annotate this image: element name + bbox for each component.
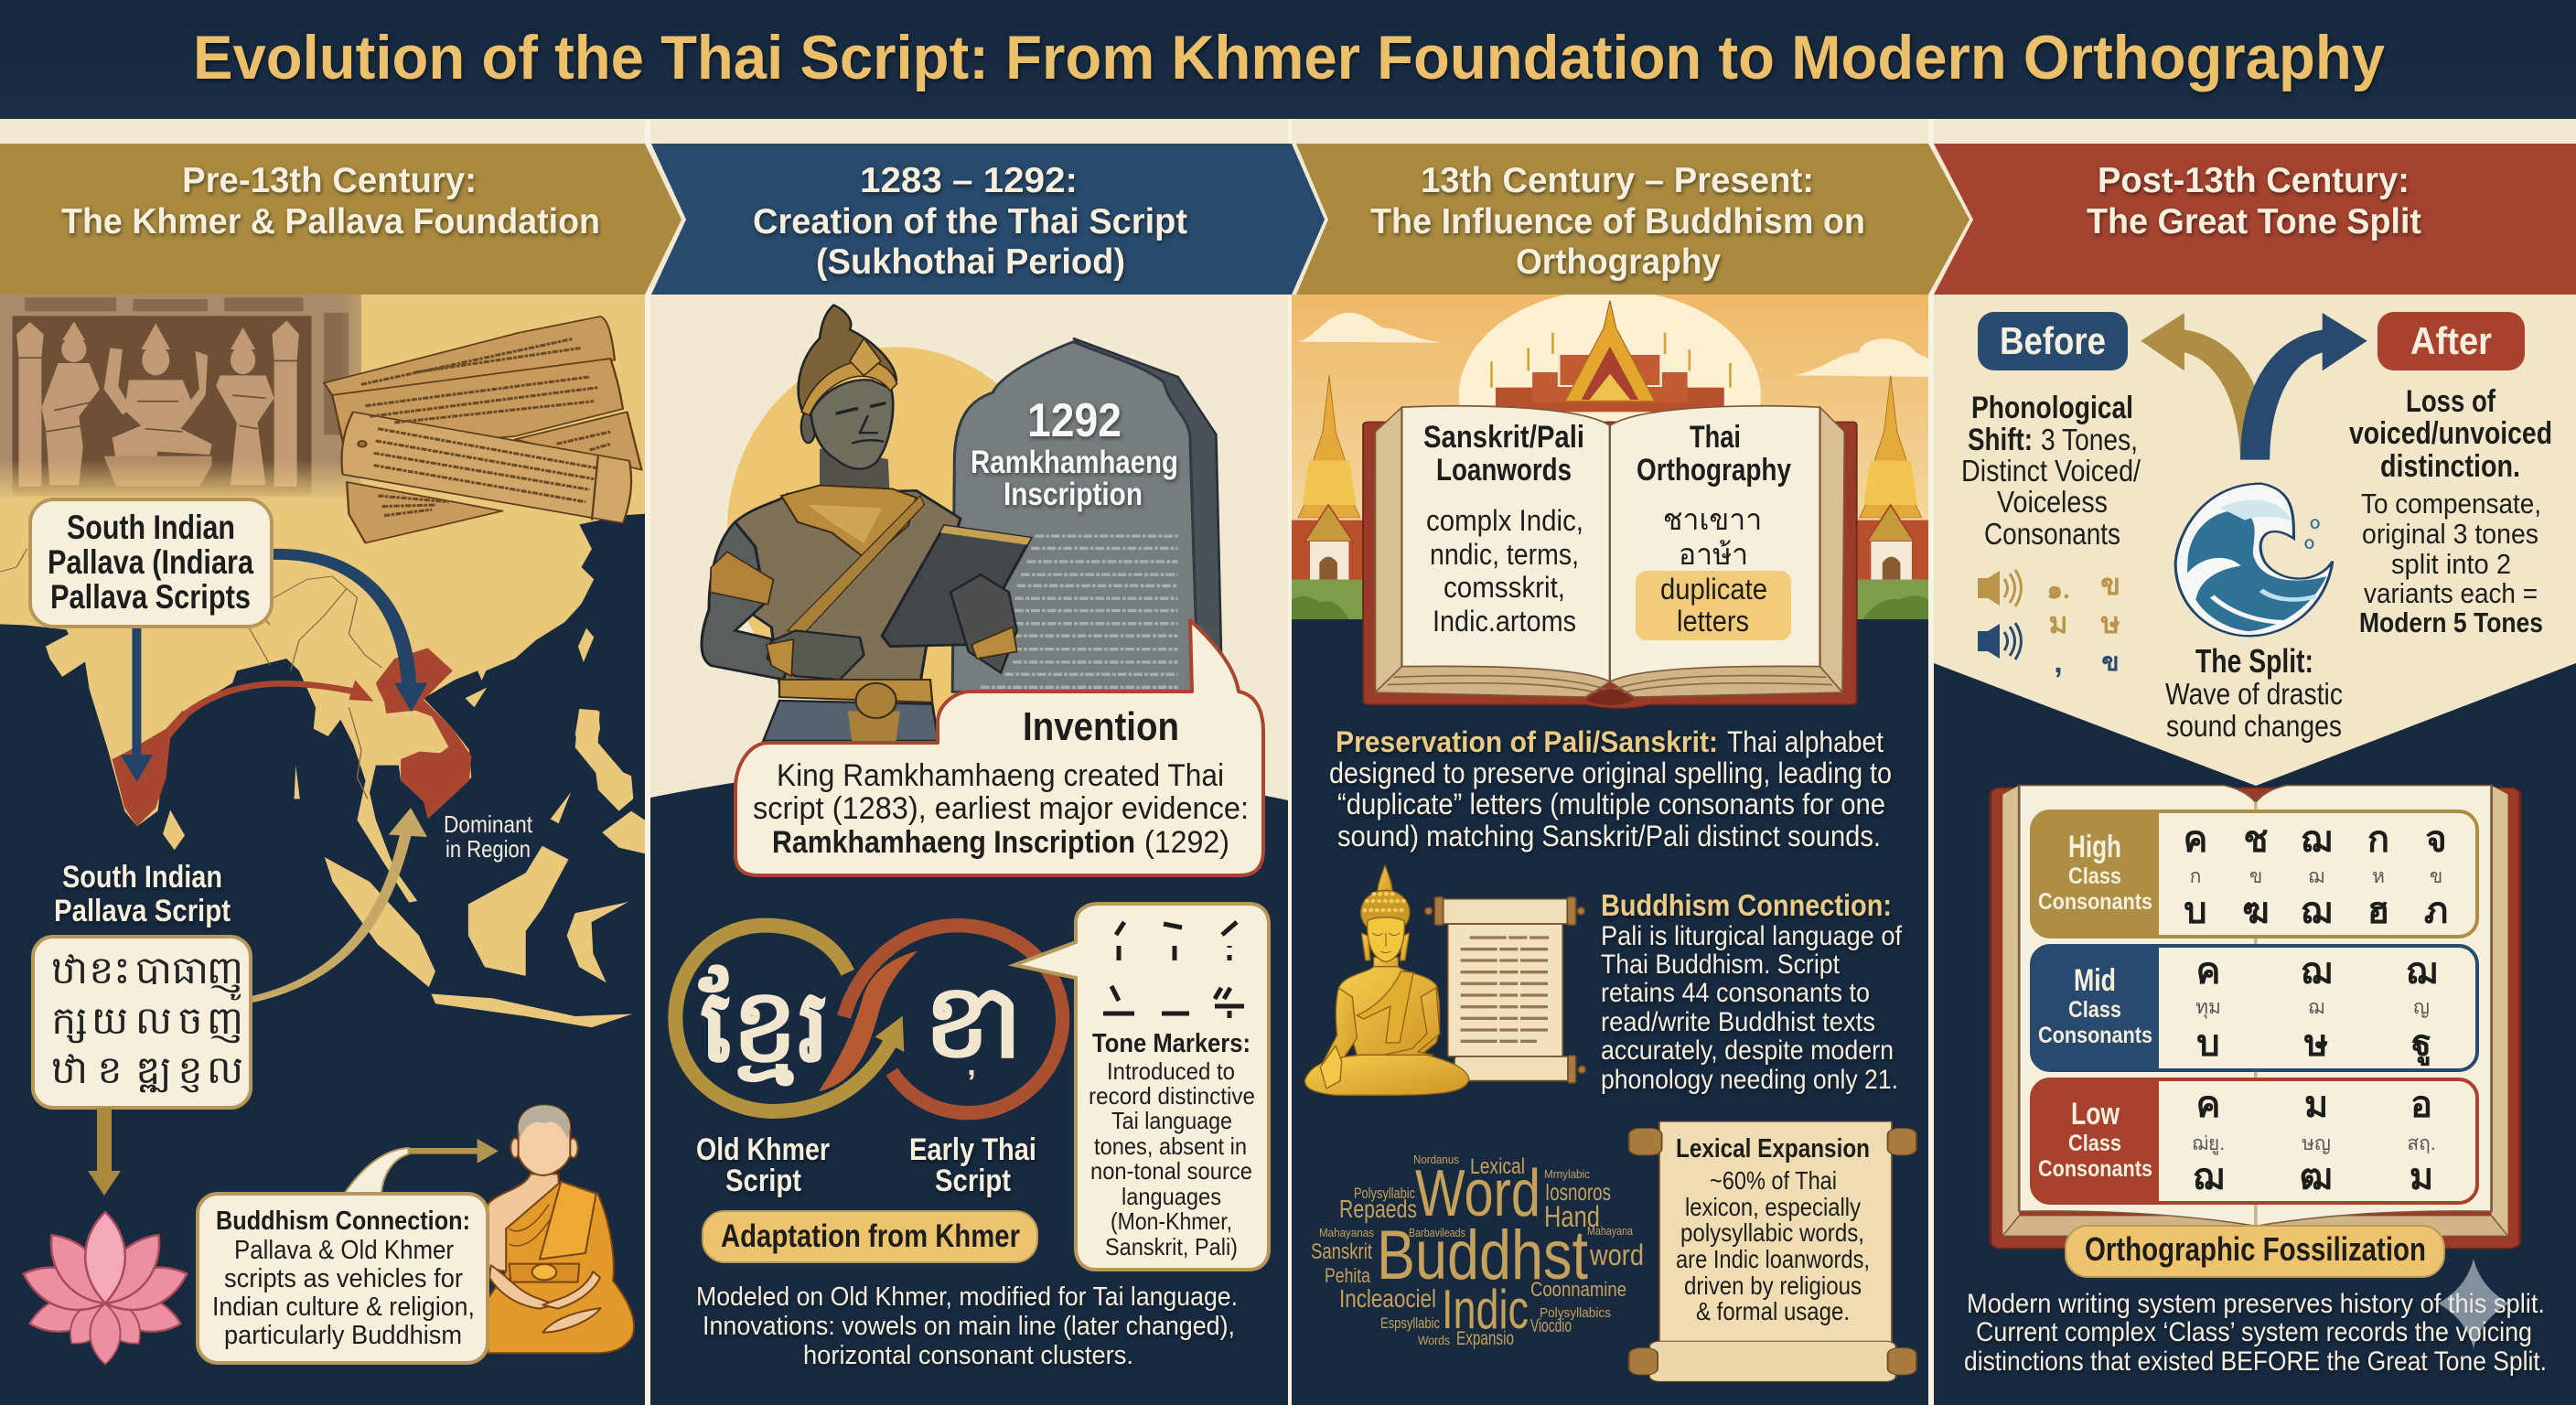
heading: south indian pallava script: South Indian xyxy=(62,860,222,895)
callout: buddhism connection: scripts as vehicles for xyxy=(224,1264,463,1293)
map of South and Southeast Asia xyxy=(0,290,645,1027)
book text left: sanskrit pali loanwords xyxy=(1423,420,1584,638)
icon: sparkle watermark xyxy=(2438,1259,2509,1348)
icons: voiced and voiceless sounds: ๑. xyxy=(2046,575,2070,604)
text: modeled on old khmer: Modeled on Old Khmer, modified for Tai language. xyxy=(696,1282,1238,1312)
row: high class consonants: ฆ xyxy=(2242,891,2270,931)
text: loss of distinction: Loss of xyxy=(2406,384,2496,419)
consonant class book xyxy=(1991,786,2520,1249)
book text left: sanskrit pali loanwords: complx Indic, xyxy=(1426,504,1583,537)
word cloud: Polysyllabics xyxy=(1540,1305,1611,1321)
word cloud: Espsyllabic xyxy=(1380,1314,1440,1332)
word cloud: Word xyxy=(1415,1157,1540,1230)
text: phonological shift: Shift: xyxy=(1968,423,2033,457)
stele inscription text: 1292 xyxy=(1027,394,1122,447)
callout: tone markers: tones, absent in xyxy=(1094,1132,1247,1160)
row: mid class consonants: ฌ xyxy=(2301,951,2332,992)
book text left: sanskrit pali loanwords: Loanwords xyxy=(1436,453,1572,488)
label: south indian pallava scripts xyxy=(30,499,272,627)
script sample box: ញូ xyxy=(207,949,243,1001)
label: dominant in region: in Region xyxy=(445,835,531,863)
panel: column 3 influence of Buddhism xyxy=(1292,290,1928,1405)
word cloud: Sanskrit xyxy=(1311,1239,1372,1264)
text: phonological shift: 3 Tones, xyxy=(2041,423,2138,456)
text: phonological shift: Voiceless xyxy=(1997,485,2108,519)
header: column 2: (Sukhothai Period) xyxy=(816,242,1125,282)
word cloud: Indic xyxy=(1442,1279,1529,1340)
word cloud: Words xyxy=(1418,1333,1450,1347)
callout: tone markers: (Mon-Khmer, xyxy=(1111,1207,1232,1235)
word cloud: Repaeds xyxy=(1339,1195,1417,1223)
header: column 3: Orthography xyxy=(1516,242,1721,282)
script sample box: ខះ xyxy=(89,949,131,992)
word cloud: Buddhst xyxy=(1377,1217,1588,1294)
label: dominant in region xyxy=(444,810,533,863)
icon: monk xyxy=(488,1105,634,1353)
labels: script names: Script xyxy=(725,1164,801,1198)
label: dominant in region: Dominant xyxy=(444,810,533,838)
row: mid class consonants: ค xyxy=(2196,951,2220,992)
row: mid class consonants: ฐู xyxy=(2411,1024,2431,1066)
header: column 1 xyxy=(0,144,682,295)
script sample box: ច xyxy=(178,999,202,1042)
relief carving xyxy=(0,295,415,502)
row: high class consonants: บ xyxy=(2184,891,2207,931)
pill: orthographic fossilization xyxy=(2066,1226,2444,1277)
pill: after: After xyxy=(2410,319,2492,362)
script sample box: ខ្ញ xyxy=(178,1048,202,1093)
script sample box: ខ xyxy=(98,1048,122,1091)
book text right: thai orthography: ชาเขาา xyxy=(1663,503,1762,536)
scroll: lexical expansion: ~60% of Thai xyxy=(1710,1166,1837,1195)
text: loss of distinction: variants each = xyxy=(2364,577,2538,609)
text: preservation of pali sanskrit xyxy=(1329,725,1892,853)
row: high class consonants: Class xyxy=(2068,863,2121,889)
king and stele illustration xyxy=(702,305,1222,741)
callout: invention: Invention xyxy=(1023,704,1179,749)
icon: pali scroll xyxy=(1425,897,1585,1083)
text: buddhism connection: Buddhism Connection: xyxy=(1601,888,1892,922)
row: high class consonants: ข xyxy=(2430,866,2442,887)
row: low class consonants: สฤ. xyxy=(2407,1133,2436,1154)
row: mid class consonants: ญ xyxy=(2413,997,2430,1018)
header: column 3: 13th Century – Present: xyxy=(1421,161,1814,200)
header: column 2: 1283 – 1292: xyxy=(860,161,1078,200)
arrows: split xyxy=(2141,313,2367,460)
open book xyxy=(1363,406,1857,708)
heading: south indian pallava script: Pallava Script xyxy=(54,894,231,928)
scroll: lexical expansion: Lexical Expansion xyxy=(1676,1134,1870,1164)
row: high class consonants xyxy=(2032,811,2477,937)
header: column 3: The Influence of Buddhism on xyxy=(1370,202,1865,241)
map arrows xyxy=(121,554,428,782)
word cloud: Expansio xyxy=(1456,1328,1514,1349)
row: high class consonants: ข xyxy=(2249,866,2262,887)
stele inscription text xyxy=(971,394,1178,512)
text: loss of distinction: original 3 tones xyxy=(2362,518,2538,550)
word cloud: Iosnoros xyxy=(1545,1178,1611,1206)
label: south indian pallava scripts: Pallava (Indiara xyxy=(48,543,253,581)
row: mid class consonants: ฌ xyxy=(2406,951,2437,992)
text: buddhism connection: read/write Buddhist texts xyxy=(1601,1007,1875,1037)
callout: tone markers xyxy=(1014,904,1269,1270)
text: preservation of pali sanskrit: sound) matching Sanskrit/Pali distinct sounds. xyxy=(1337,820,1881,853)
word cloud: Polysyllabic xyxy=(1354,1185,1415,1202)
panel: column 2 creation of the Thai script xyxy=(650,295,1288,1370)
word cloud: Coonnamine xyxy=(1530,1278,1626,1301)
script sample box: ញ xyxy=(207,999,243,1044)
text: loss of distinction: Modern 5 Tones xyxy=(2359,606,2543,638)
text: phonological shift: Distinct Voiced/ xyxy=(1961,454,2141,488)
icons: voiced and voiceless sounds: ม xyxy=(2048,606,2068,639)
highlight: duplicate letters: letters xyxy=(1677,605,1749,638)
callout: invention: Ramkhamhaeng Inscription xyxy=(772,825,1135,860)
text: preservation of pali sanskrit: “duplicate” letters (multiple consonants for one xyxy=(1337,788,1885,820)
label: south indian pallava scripts: Pallava Scripts xyxy=(50,578,251,616)
row: low class consonants: Low xyxy=(2071,1097,2120,1132)
icons: voiced and voiceless sounds: ษ xyxy=(2100,606,2120,639)
script sample box: ឋា xyxy=(51,949,88,992)
book text right: thai orthography: Thai xyxy=(1690,420,1741,455)
labels: script names: Early Thai xyxy=(909,1132,1036,1167)
icons: voiced and voiceless sounds: ข xyxy=(2100,568,2120,601)
word cloud: word xyxy=(1589,1239,1644,1271)
word cloud: Mahayanas xyxy=(1319,1226,1374,1239)
book text left: sanskrit pali loanwords: comsskrit, xyxy=(1444,571,1565,604)
row: mid class consonants: ทุม xyxy=(2195,997,2221,1019)
callout: invention: (1292) xyxy=(1144,825,1229,860)
text: buddhism connection xyxy=(1601,888,1903,1095)
pill: adaptation from khmer xyxy=(703,1211,1037,1262)
row: mid class consonants: ษ xyxy=(2304,1024,2328,1064)
text: preservation of pali sanskrit: designed to preserve original spelling, leading to xyxy=(1329,756,1892,789)
row: low class consonants: Class xyxy=(2068,1131,2121,1156)
palm leaf manuscripts xyxy=(324,316,641,543)
arrow: pallava script to southeast asia xyxy=(246,808,427,1001)
title: Evolution of the Thai Script: From Khmer Foundation to Modern Orthography xyxy=(193,23,2385,92)
row: high class consonants: ช xyxy=(2243,820,2269,860)
title banner xyxy=(0,0,2576,295)
book text left: sanskrit pali loanwords: Sanskrit/Pali xyxy=(1423,420,1584,455)
header: column 2: Creation of the Thai Script xyxy=(753,202,1187,241)
row: mid class consonants: Class xyxy=(2068,997,2121,1023)
callout: buddhism connection: Indian culture & religion, xyxy=(212,1292,475,1322)
word cloud: Barbavileads xyxy=(1409,1226,1465,1239)
stele inscription text: Inscription xyxy=(1004,477,1143,512)
glyph: old khmer: ខ្មែរ xyxy=(698,964,830,1087)
word cloud: Nordanus xyxy=(1413,1153,1459,1166)
callout: buddhism connection xyxy=(198,1139,499,1363)
row: high class consonants: จ xyxy=(2425,820,2447,860)
row: low class consonants: อ xyxy=(2410,1085,2432,1125)
row: low class consonants: ม xyxy=(2410,1157,2433,1197)
text: buddhism connection: Thai Buddhism. Script xyxy=(1601,949,1841,980)
scroll: lexical expansion xyxy=(1629,1121,1916,1381)
row: high class consonants: ก xyxy=(2190,866,2201,887)
text: preservation of pali sanskrit: Thai alphabet xyxy=(1727,725,1884,758)
scroll: lexical expansion: polysyllabic words, xyxy=(1680,1218,1864,1247)
callout: tone markers: Tai language xyxy=(1111,1107,1232,1134)
row: high class consonants: ภ xyxy=(2424,891,2448,931)
row: low class consonants: ษญ xyxy=(2302,1133,2331,1154)
text: modern writing system xyxy=(1964,1289,2547,1377)
row: mid class consonants: Consonants xyxy=(2038,1023,2152,1048)
panel: column 4 great tone split xyxy=(1934,295,2576,1405)
text: loss of distinction: To compensate, xyxy=(2361,488,2541,520)
header: column 4: Post-13th Century: xyxy=(2098,161,2410,200)
pill: orthographic fossilization: Orthographic Fossilization xyxy=(2085,1230,2426,1268)
book text left: sanskrit pali loanwords: nndic, terms, xyxy=(1430,538,1579,571)
script sample box: ឋា xyxy=(51,1048,88,1091)
row: high class consonants: ฌ xyxy=(2301,891,2332,931)
book text right: thai orthography: อาษ้า xyxy=(1679,538,1748,571)
script sample box: ល xyxy=(207,1048,243,1091)
row: low class consonants: ฌ xyxy=(2193,1157,2224,1197)
row: mid class consonants: Mid xyxy=(2074,963,2116,998)
word cloud: Hand xyxy=(1544,1200,1600,1233)
diagram: Old Khmer to Early Thai xyxy=(675,926,1063,1113)
heading: south indian pallava script xyxy=(54,860,231,928)
word cloud: Incleaociel xyxy=(1339,1284,1436,1313)
highlight: duplicate letters: duplicate xyxy=(1660,573,1767,606)
glyph: early thai: , xyxy=(967,1047,976,1082)
panel: column 1 Khmer and Pallava foundation xyxy=(0,290,645,1405)
row: low class consonants: ม xyxy=(2304,1085,2328,1125)
row: high class consonants: ฌ xyxy=(2308,866,2324,887)
script sample box: ធា xyxy=(172,949,209,992)
callout: invention: script (1283), earliest major evidence: xyxy=(753,791,1249,826)
row: high class consonants: ฮ xyxy=(2367,891,2389,931)
word cloud: Lexical xyxy=(1470,1154,1525,1179)
text: modeled on old khmer: Innovations: vowels on main line (later changed), xyxy=(703,1312,1235,1341)
row: low class consonants: ฒ xyxy=(2300,1157,2333,1197)
row: high class consonants: ห xyxy=(2372,866,2385,887)
text: loss of distinction: distinction. xyxy=(2380,449,2520,484)
icon: wave xyxy=(2175,484,2333,636)
header: column 1: The Khmer & Pallava Foundation xyxy=(61,202,600,241)
row: mid class consonants: ฌ xyxy=(2308,997,2324,1018)
icons: voiced and voiceless sounds: , xyxy=(2054,645,2063,680)
text: preservation of pali sanskrit: Preservation of Pali/Sanskrit: xyxy=(1336,725,1718,758)
text: buddhism connection: phonology needing only 21. xyxy=(1601,1065,1898,1095)
script sample box: ឌ្ឍ xyxy=(135,1048,172,1093)
row: low class consonants: ฌ่ยู. xyxy=(2192,1133,2225,1155)
pill: adaptation from khmer: Adaptation from Khmer xyxy=(721,1218,1020,1254)
pill: after xyxy=(2377,312,2525,370)
callout: buddhism connection: Pallava & Old Khmer xyxy=(234,1236,454,1265)
script sample box: បា xyxy=(135,949,172,992)
text: phonological shift: Consonants xyxy=(1984,517,2120,551)
header: column 4: The Great Tone Split xyxy=(2087,202,2421,241)
scroll: lexical expansion: & formal usage. xyxy=(1696,1297,1850,1325)
row: low class consonants: Consonants xyxy=(2038,1156,2152,1182)
text: modeled on old khmer xyxy=(696,1282,1238,1370)
book text right: thai orthography xyxy=(1636,420,1791,640)
word cloud: Viocdio xyxy=(1530,1316,1572,1336)
text: buddhism connection: retains 44 consonants to xyxy=(1601,978,1870,1008)
pill: before: Before xyxy=(2000,319,2106,362)
row: mid class consonants: บ xyxy=(2196,1024,2220,1064)
icon: golden buddha xyxy=(1305,865,1469,1095)
callout: tone markers: non-tonal source xyxy=(1090,1157,1252,1185)
text: modeled on old khmer: horizontal consonant clusters. xyxy=(803,1341,1133,1370)
icons: voiced and voiceless sounds: ข xyxy=(2101,648,2120,676)
callout: invention: King Ramkhamhaeng created Thai xyxy=(777,758,1224,793)
word cloud: Mahayana xyxy=(1587,1224,1634,1238)
scroll: lexical expansion: are Indic loanwords, xyxy=(1676,1245,1870,1273)
row: high class consonants: ค xyxy=(2184,820,2207,860)
header: column 1: Pre-13th Century: xyxy=(182,161,477,200)
text: the split: Wave of drastic xyxy=(2165,677,2343,711)
stele inscription text: Ramkhamhaeng xyxy=(971,445,1178,480)
row: high class consonants: ฌ xyxy=(2301,820,2332,860)
callout: tone markers: Introduced to xyxy=(1107,1057,1235,1085)
row: high class consonants: ก xyxy=(2367,820,2389,860)
header: column 2 xyxy=(651,144,1325,295)
scroll: lexical expansion: lexicon, especially xyxy=(1685,1193,1861,1221)
word cloud: Mrnylabic xyxy=(1544,1167,1590,1181)
callout: buddhism connection: particularly Buddhism xyxy=(224,1321,462,1350)
temple scene xyxy=(1292,290,1928,619)
callout: buddhism connection: Buddhism Connection: xyxy=(216,1207,470,1236)
text: the split: The Split: xyxy=(2195,642,2313,680)
text: phonological shift: Phonological xyxy=(1971,391,2133,425)
script sample box: ល xyxy=(135,999,172,1042)
pill: before xyxy=(1978,312,2128,370)
row: low class consonants xyxy=(2032,1079,2477,1203)
callout: invention xyxy=(735,620,1263,875)
callout: tone markers: languages xyxy=(1122,1183,1221,1210)
text: the split xyxy=(2165,642,2343,743)
word cloud xyxy=(1311,1153,1644,1349)
labels: script names: Script xyxy=(935,1164,1011,1198)
labels: script names: Old Khmer xyxy=(696,1132,830,1167)
arrow: script down to lotus xyxy=(88,1108,121,1196)
row: mid class consonants xyxy=(2032,946,2477,1070)
text: loss of distinction: split into 2 xyxy=(2391,548,2511,580)
row: high class consonants: High xyxy=(2068,830,2121,864)
script sample box: ក្ស xyxy=(51,999,88,1044)
scroll: lexical expansion: driven by religious xyxy=(1684,1271,1862,1300)
column dividers xyxy=(645,119,1934,1405)
script sample box: យ xyxy=(91,999,128,1042)
callout: tone markers: Sanskrit, Pali) xyxy=(1105,1233,1238,1260)
header: column 4 xyxy=(1934,144,2576,295)
highlight: duplicate letters xyxy=(1636,571,1791,640)
glyph: early thai: ខា xyxy=(925,964,1022,1078)
text: buddhism connection: accurately, despite modern xyxy=(1601,1035,1894,1066)
script sample box xyxy=(33,937,251,1108)
book text right: thai orthography: Orthography xyxy=(1637,453,1791,488)
text: phonological shift xyxy=(1961,391,2141,551)
text: the split: sound changes xyxy=(2166,709,2342,743)
labels: script names xyxy=(696,1132,1036,1198)
callout: tone markers: record distinctive xyxy=(1089,1082,1255,1110)
row: high class consonants: Consonants xyxy=(2038,889,2152,915)
word cloud: Pehita xyxy=(1325,1264,1371,1287)
header: column 3 xyxy=(1296,144,1970,295)
text: buddhism connection: Pali is liturgical language of xyxy=(1601,921,1903,951)
row: low class consonants: ค xyxy=(2196,1085,2220,1125)
book text left: sanskrit pali loanwords: Indic.artoms xyxy=(1433,605,1576,638)
label: south indian pallava scripts: South Indian xyxy=(67,509,235,546)
text: loss of distinction xyxy=(2349,384,2552,638)
icon: lotus xyxy=(17,1212,193,1365)
callout: tone markers: Tone Markers: xyxy=(1092,1029,1250,1058)
icons: voiced and voiceless sounds xyxy=(1978,568,2120,680)
